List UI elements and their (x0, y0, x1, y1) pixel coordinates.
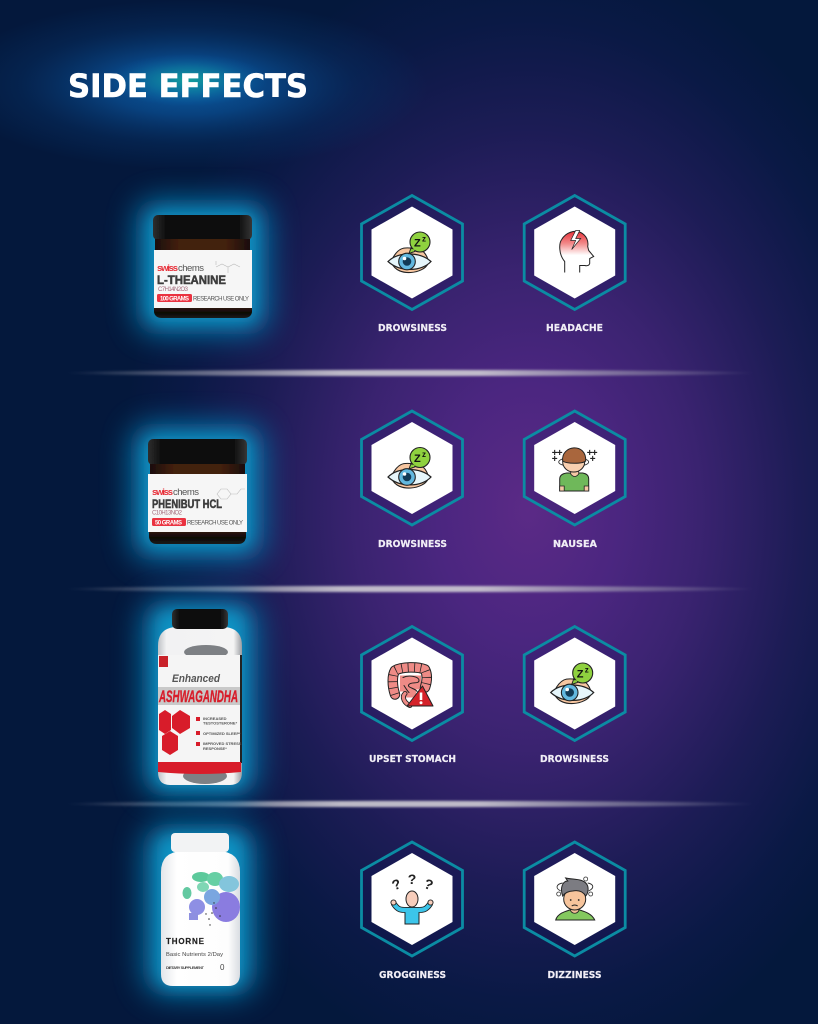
divider 3 (65, 801, 755, 807)
product: Phenibut HCL jar (131, 424, 264, 560)
nausea hexagon (524, 411, 625, 525)
product: L-Theanine jar: 100 GRAMS (160, 296, 189, 302)
label: dizziness: DIZZINESS (548, 970, 602, 981)
product: L-Theanine jar: RESEARCH USE ONLY (193, 296, 249, 302)
nausea hexagon: + (587, 448, 593, 459)
product: Thorne bottle (143, 824, 257, 996)
label: upset stomach: UPSET STOMACH (369, 754, 456, 765)
product: L-Theanine jar: C7H14N2O3 (158, 287, 189, 293)
divider 1 (65, 370, 755, 376)
grogginess hexagon (362, 842, 462, 956)
label: drowsiness: DROWSINESS (378, 539, 447, 550)
dizziness hexagon (524, 842, 625, 956)
label: drowsiness: DROWSINESS (378, 323, 447, 334)
label: grogginess: GROGGINESS (379, 970, 446, 981)
product: Ashwagandha bottle: ASHWAGANDHA (158, 687, 238, 706)
product: L-Theanine jar (136, 200, 269, 334)
product: Phenibut HCL jar: PHENIBUT HCL (152, 497, 222, 511)
product: Phenibut HCL jar: 50 GRAMS (155, 520, 182, 526)
divider 2 (65, 586, 755, 592)
product: Thorne bottle: Basic Nutrients 2/Day (166, 952, 223, 958)
nausea hexagon: + (552, 448, 558, 459)
grogginess hexagon: ? (390, 875, 403, 893)
drowsiness hexagon, row 3 (524, 626, 625, 740)
grogginess hexagon: ? (422, 875, 435, 893)
title glow (0, 0, 428, 170)
product: Phenibut HCL jar: chems (173, 487, 199, 498)
product: Ashwagandha bottle: TESTOSTERONE* (203, 720, 238, 726)
nausea hexagon: + (590, 454, 596, 465)
product: Thorne bottle: DIETARY SUPPLEMENT (166, 965, 205, 970)
product: Thorne bottle: THORNE (166, 937, 205, 946)
product: Ashwagandha bottle (142, 600, 258, 796)
nausea hexagon: + (552, 454, 558, 465)
product: Phenibut HCL jar: RESEARCH USE ONLY (187, 520, 243, 526)
nausea hexagon: + (557, 448, 563, 459)
product: Ashwagandha bottle: Enhanced (172, 673, 220, 685)
drowsiness hexagon, row 1 (362, 196, 462, 310)
product: L-Theanine jar: swiss (157, 263, 178, 274)
label: headache: HEADACHE (546, 323, 603, 334)
product: L-Theanine jar: L-THEANINE (157, 273, 226, 287)
label: nausea: NAUSEA (553, 539, 597, 550)
product: Ashwagandha bottle: RESPONSE* (203, 746, 227, 751)
product: Phenibut HCL jar: C10H13NO2 (152, 510, 183, 516)
product: Phenibut HCL jar: swiss (152, 487, 173, 498)
headache hexagon (524, 196, 625, 310)
product: Thorne bottle: 0 (220, 963, 225, 972)
drowsiness hexagon, row 2 (362, 411, 462, 525)
label: drowsiness: DROWSINESS (540, 754, 609, 765)
grogginess hexagon: ? (408, 871, 416, 887)
nausea hexagon: + (592, 448, 598, 459)
upset stomach hexagon (362, 626, 462, 740)
product: Ashwagandha bottle: IMPROVED STRESS (203, 741, 242, 746)
product: Ashwagandha bottle: OPTIMIZED SLEEP* (203, 731, 241, 736)
title: SIDE EFFECTS (68, 67, 308, 105)
product: L-Theanine jar: chems (178, 263, 204, 274)
product: Ashwagandha bottle: INCREASED (203, 716, 227, 721)
